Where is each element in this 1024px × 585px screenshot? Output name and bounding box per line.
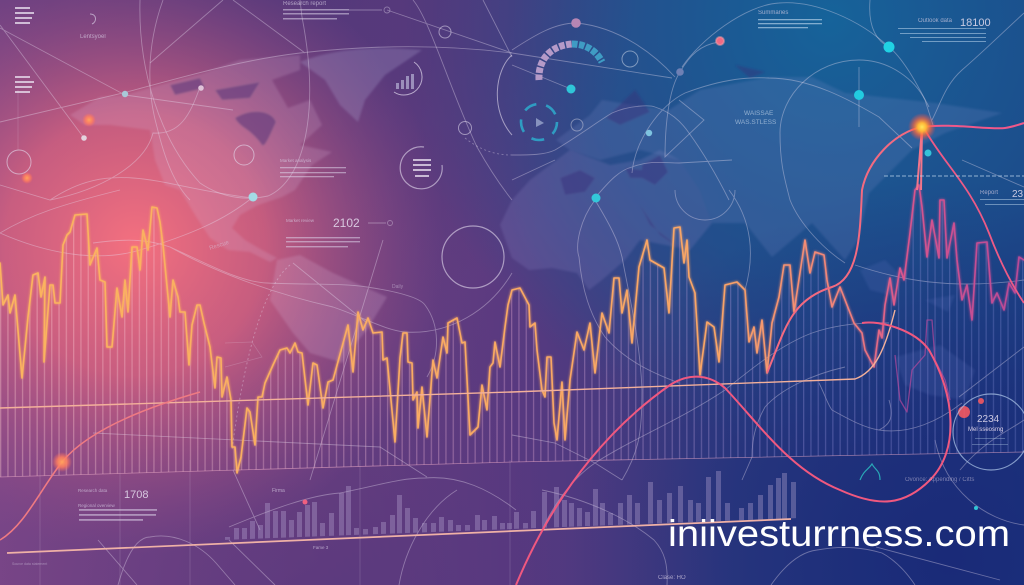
cyan nodes [122,42,978,510]
lines: alaska to caribbean [0,87,253,200]
peak central spike [917,127,922,190]
list icon top left [15,8,34,23]
map: asia [556,77,1002,260]
circle: chart ring [394,62,422,95]
circle: mid ring [442,226,504,288]
text block top right number: 18100 [960,17,991,29]
map: hudson bay and arctic waters [170,78,276,145]
lines: large oval [140,0,310,200]
small bottom labels: Source data statement [12,562,47,566]
red small bar marker [302,500,308,504]
large circles [7,26,1024,470]
text block top left centre: Research report [283,1,326,7]
text block bottom left 1708: Regional overview [78,503,116,508]
text block bottom left 1708: Research data [78,488,108,493]
glow: right circle small [978,398,984,404]
text block circle data: 2234 [977,414,1000,425]
small bottom labels: Clase: HO [658,575,686,581]
horizontal trend line [0,310,895,408]
text block right edge number [980,189,1024,205]
small bottom labels [12,240,974,581]
glowing markers [21,37,984,504]
play ring icon [521,104,583,140]
lines: gauge network [512,3,929,157]
map: greenland [300,48,422,122]
world map [70,48,1002,400]
small bottom labels: Ovorice: Appending / Citts [905,477,974,483]
text block 2102 [286,216,392,247]
text block right edge number: Report [980,190,998,196]
pink curve to the east [922,123,1024,128]
text block map label: WAS.STLESS [735,119,777,126]
text block map label: WAISSAE [744,110,774,117]
text block top centre right [758,10,822,28]
main peak glow [908,113,936,141]
circle: number ring [458,122,472,134]
circle: small map ring [234,145,254,165]
lines: big arc [512,78,912,200]
lines: lower right [542,265,1024,585]
text block circle data: Mel sseosmg [968,427,1003,433]
small bottom labels: Daily [392,284,404,290]
text block top right number [898,17,991,42]
pink curve from peak to valley [767,127,922,373]
circle: left icon ring [7,150,31,174]
text block north america: Market analysis [280,158,312,163]
lines: africa oval [578,190,750,480]
text block north america [280,158,346,177]
circle: right data ring [953,394,1024,470]
map: south america [270,255,387,363]
text block bottom left 1708: 1708 [124,489,148,501]
small teal icon [860,464,880,480]
circle: top ring [439,26,451,38]
text block top centre right: Summaries [758,10,788,16]
glow: left marker [21,172,33,184]
pink curve descending right [925,130,1024,303]
small bottom labels: Fame 3 [313,545,329,550]
watermark url: iniivesturrness.com [668,513,1010,554]
lines: northwest [0,0,512,138]
list icons [15,8,431,176]
small bottom labels: Firma [272,488,285,494]
chart baseline [0,452,1024,477]
map: north america [70,55,332,262]
baseline axis [7,519,791,553]
left lower glow [52,452,72,472]
text block right edge number: 23 [1012,189,1024,200]
text block circle data [968,414,1008,445]
map: inland seas [560,65,765,255]
trend lines [0,123,1024,585]
nodes [81,18,978,510]
map: southeast islands [860,260,975,400]
list icon left [15,77,34,92]
red node [716,37,724,45]
text block 2102: 2102 [333,216,360,230]
lines: faint grid [18,90,510,585]
faint secondary magenta line [895,320,950,412]
dashed flight path [232,138,512,450]
glow: alaska [82,113,96,127]
map: europe and africa [500,150,712,290]
text block map label [735,110,777,126]
lines: top right [780,0,1024,263]
gauge icon [539,44,638,80]
vertical bars under peak line [0,198,1024,477]
lines: lower centre [512,323,1024,535]
lines: upper right diagonals [387,0,512,200]
hearing icon label: Lentsyoel [80,34,106,40]
circle: right arc [497,55,512,135]
hearing icon label [80,14,106,40]
text block bottom left 1708 [78,488,157,521]
lines: south america arcs [0,190,512,480]
glow: right circle [958,406,970,418]
text block 2102: Market review [286,218,315,223]
left pink rise line [0,392,200,540]
small bottom labels: Rescue [209,240,231,252]
large pink loop [516,322,951,585]
dashed level line [884,175,1024,177]
text block top right number: Outlook data [918,18,953,24]
mini chart icon [396,74,414,89]
list icon center [413,160,431,176]
lower bar chart [225,471,796,540]
lines: lower left [93,433,516,585]
peak line chart [0,185,1024,473]
circle: list ring [400,147,442,189]
slate and mauve nodes [81,18,684,141]
text block top left centre [283,1,390,20]
